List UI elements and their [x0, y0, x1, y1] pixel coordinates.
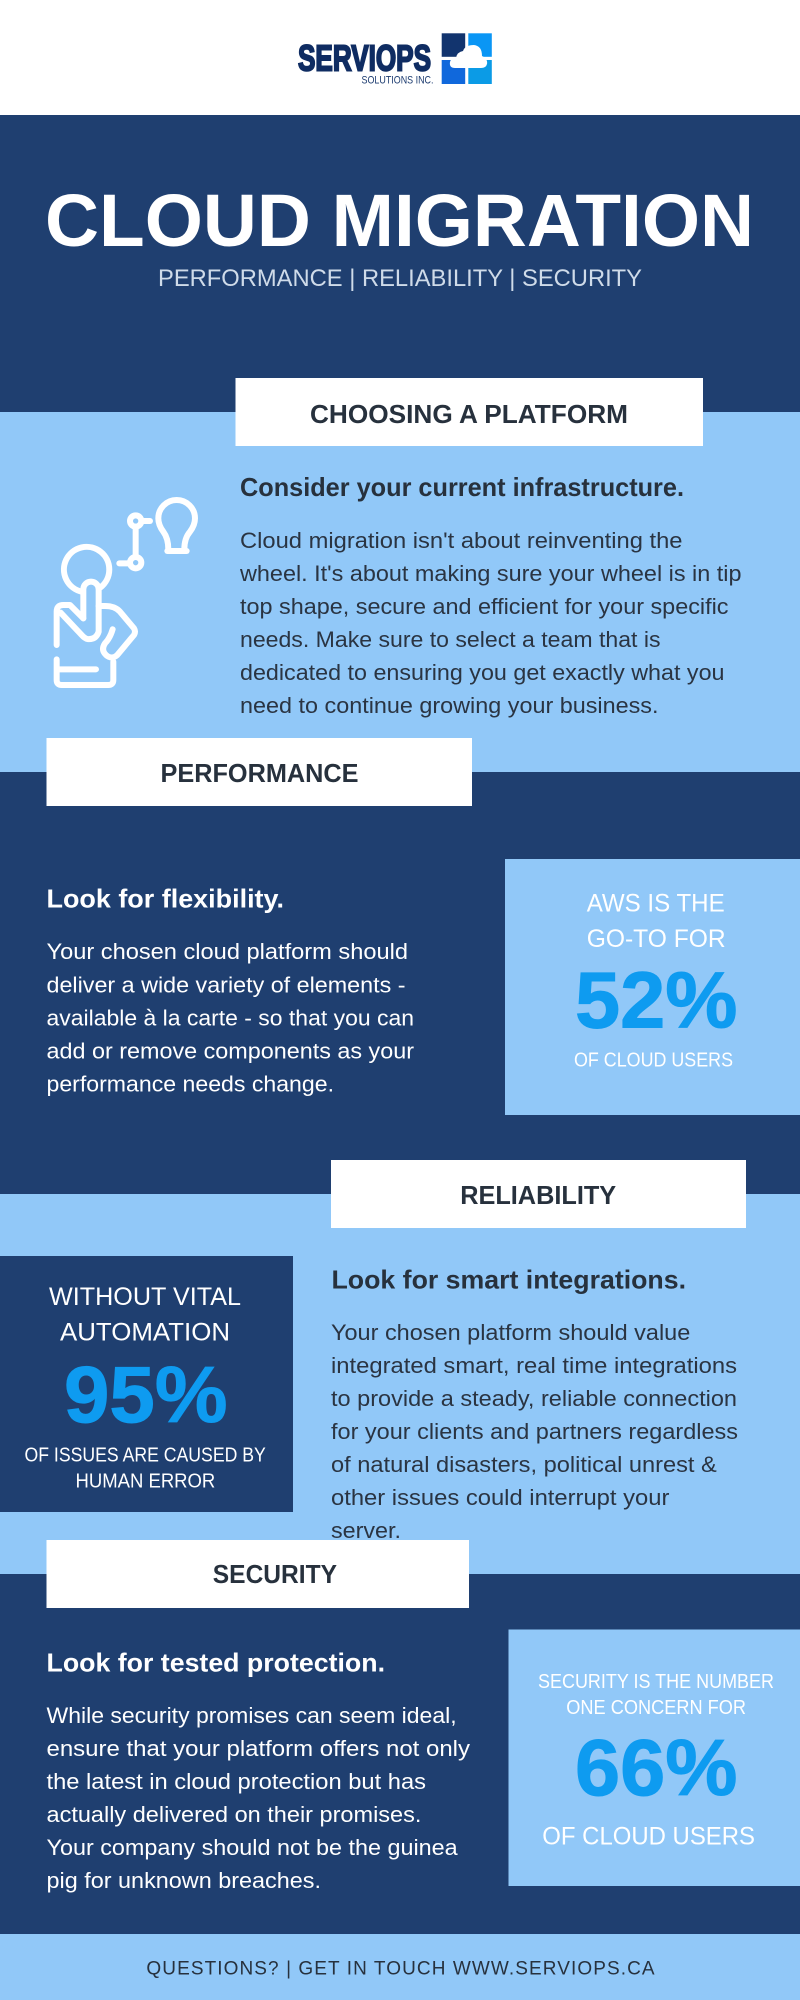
- body text: wheel. It's about making sure your wheel is in tip: [239, 561, 742, 586]
- heading box: security: SECURITY: [213, 1559, 337, 1589]
- body text: dedicated to ensuring you get exactly what you: [240, 660, 724, 685]
- body text: available à la carte - so that you can: [46, 1006, 414, 1030]
- body text: [46, 939, 414, 1096]
- subheading: Look for tested protection.: [46, 1648, 385, 1678]
- body text: other issues could interrupt your: [331, 1485, 669, 1510]
- body text: pig for unknown breaches.: [46, 1868, 321, 1893]
- band: choosing a platform: [0, 412, 800, 772]
- stat card: 95%: AUTOMATION: [60, 1319, 230, 1347]
- stat card: 66%: ONE CONCERN FOR: [566, 1696, 746, 1719]
- body text: to provide a steady, reliable connection: [331, 1386, 737, 1411]
- panel: choosing a platform: [57, 378, 742, 718]
- stat card: 66%: OF CLOUD USERS: [542, 1823, 755, 1851]
- body text: Cloud migration isn't about reinventing the: [240, 528, 682, 553]
- stat card: 52%: [505, 859, 800, 1115]
- band: footer: [0, 1934, 800, 2000]
- hero band: [0, 115, 800, 412]
- band: reliability: [0, 1194, 800, 1574]
- heading box: reliability: [331, 1160, 746, 1228]
- heading box: reliability: RELIABILITY: [460, 1180, 616, 1210]
- stat card: 95%: HUMAN ERROR: [76, 1471, 215, 1493]
- body text: Your chosen platform should value: [331, 1320, 690, 1345]
- body text: performance needs change.: [46, 1072, 334, 1096]
- body text: need to continue growing your business.: [240, 693, 658, 718]
- body text: top shape, secure and efficient for your specific: [240, 594, 728, 619]
- logo wordmark: SERVIOPS: [298, 38, 431, 78]
- panel: reliability: [0, 1160, 746, 1543]
- logo: [298, 33, 492, 86]
- stat card: 52%: OF CLOUD USERS: [574, 1050, 733, 1072]
- subheading: Look for flexibility.: [46, 884, 284, 914]
- icon: person thinking with light bulb: [57, 500, 195, 685]
- title: CLOUD MIGRATION: [45, 179, 754, 262]
- subheading: Look for smart integrations.: [332, 1264, 686, 1294]
- subtitle: PERFORMANCE | RELIABILITY | SECURITY: [158, 265, 642, 292]
- body text: [331, 1320, 738, 1543]
- panel: performance: [46, 738, 800, 1115]
- logo mark: [442, 33, 492, 84]
- body text: add or remove components as your: [46, 1038, 414, 1064]
- subheading: Consider your current infrastructure.: [240, 472, 684, 502]
- stat card: 52%: GO-TO FOR: [587, 925, 726, 953]
- stat card: 52%: 52%: [575, 956, 738, 1044]
- heading box: performance: PERFORMANCE: [160, 758, 358, 788]
- body text: deliver a wide variety of elements -: [46, 972, 406, 998]
- header band: [0, 0, 800, 115]
- band: security: [0, 1574, 800, 1934]
- stat card: 95%: OF ISSUES ARE CAUSED BY: [24, 1445, 266, 1467]
- stat card: 52%: AWS IS THE: [587, 890, 725, 918]
- stat card: 66%: 66%: [575, 1723, 738, 1812]
- panel: security: [46, 1540, 800, 1893]
- logo tagline: SOLUTIONS INC.: [362, 74, 434, 86]
- heading box: performance: [46, 738, 472, 806]
- body text: While security promises can seem ideal,: [46, 1703, 457, 1728]
- body text: ensure that your platform offers not only: [46, 1736, 470, 1761]
- heading box: choosing a platform: CHOOSING A PLATFORM: [310, 399, 628, 429]
- stat card: 66%: [508, 1630, 800, 1886]
- footer call to action: QUESTIONS? | GET IN TOUCH WWW.SERVIOPS.CA: [146, 1958, 655, 1979]
- body text: integrated smart, real time integrations: [331, 1353, 737, 1378]
- body text: [239, 528, 742, 718]
- body text: actually delivered on their promises.: [46, 1802, 421, 1827]
- body text: Your chosen cloud platform should: [46, 939, 408, 964]
- body text: [46, 1703, 470, 1893]
- heading box: security: [46, 1540, 469, 1608]
- stat card: 95%: WITHOUT VITAL: [49, 1283, 241, 1311]
- heading box: choosing a platform: [236, 378, 703, 446]
- body text: server.: [331, 1518, 401, 1543]
- body text: the latest in cloud protection but has: [46, 1769, 426, 1794]
- stat card: 95%: [0, 1256, 293, 1512]
- body text: of natural disasters, political unrest &: [331, 1452, 717, 1477]
- stat card: 95%: 95%: [64, 1350, 228, 1439]
- body text: for your clients and partners regardless: [331, 1419, 738, 1444]
- band: performance: [0, 772, 800, 1194]
- body text: Your company should not be the guinea: [46, 1835, 458, 1860]
- body text: needs. Make sure to select a team that is: [240, 627, 660, 652]
- stat card: 66%: SECURITY IS THE NUMBER: [538, 1670, 774, 1693]
